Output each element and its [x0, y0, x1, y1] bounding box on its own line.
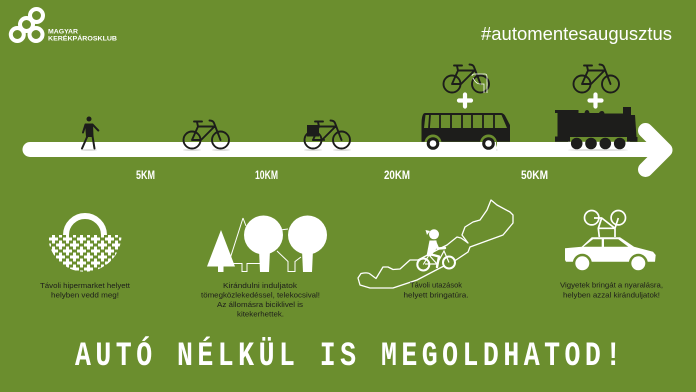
hashtag: #automentesaugusztus	[481, 24, 672, 44]
caption: trees: kitekerhettek.	[237, 310, 284, 318]
distance labels	[136, 168, 548, 182]
icon: steam locomotive	[555, 107, 638, 149]
caption: trees	[201, 281, 320, 318]
caption: car: Vigyetek bringát a nyaralásra,	[560, 280, 663, 290]
distance labels: 10KM	[255, 168, 278, 182]
caption: basket: helyben vedd meg!	[51, 290, 119, 300]
caption: basket	[40, 281, 130, 300]
caption: cycling tour: Távoli utazások	[410, 280, 462, 290]
icon: basket	[48, 216, 122, 272]
caption: trees: Kirándulni induljatok	[223, 281, 297, 290]
icon: bicycle above train	[574, 64, 619, 92]
caption: cycling tour	[404, 280, 468, 300]
icon: touring bicycle with pannier, 10 km	[304, 120, 350, 148]
distance labels: 20KM	[384, 168, 410, 182]
caption: cycling tour: helyett bringatúra.	[404, 290, 468, 300]
distance labels: 5KM	[136, 168, 155, 182]
distance labels: 50KM	[521, 168, 548, 182]
icon: bus	[422, 113, 510, 152]
icon: car with roof-mounted bicycle	[565, 210, 656, 273]
caption: basket: Távoli hipermarket helyett	[40, 281, 130, 290]
icon: plus sign, train	[590, 94, 602, 106]
main slogan: AUTÓ NÉLKÜL IS MEGOLDHATOD!	[75, 335, 626, 376]
logo: Magyar Kerékpárosklub: KERÉKPÁROSKLUB	[48, 34, 117, 42]
wheel shadows on road	[81, 149, 628, 151]
icon: bicycle above bus	[444, 64, 489, 93]
timeline arrow	[30, 130, 665, 170]
icon: bicycle, 5 km	[184, 120, 229, 148]
caption: car: helyben azzal kiránduljatok!	[563, 290, 660, 300]
icon: Hungary outline with cyclist	[358, 200, 513, 288]
icon: plus sign, bus	[459, 94, 471, 106]
icon: walking person	[82, 116, 98, 148]
logo: Magyar Kerékpárosklub	[11, 9, 117, 42]
logo: Magyar Kerékpárosklub: MAGYAR	[48, 28, 78, 36]
caption: trees: tömegközlekedéssel, telekocsival!	[201, 290, 320, 300]
caption: car	[560, 280, 663, 300]
caption: trees: Az állomásra biciklivel is	[217, 300, 303, 309]
icon: trees	[207, 216, 327, 272]
